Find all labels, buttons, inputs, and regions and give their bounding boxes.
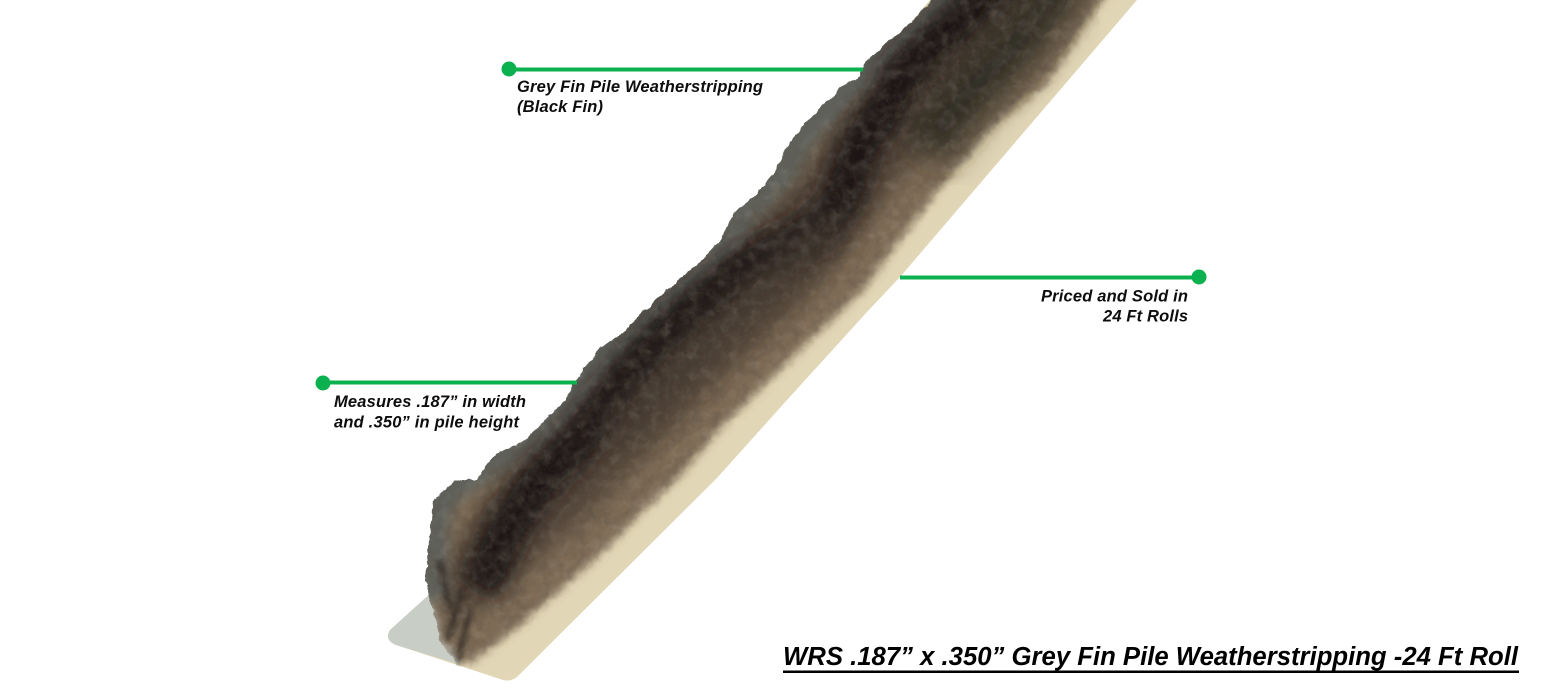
callout text: Grey Fin Pile Weatherstripping — [517, 78, 763, 96]
callout: measures — [316, 376, 577, 432]
tan backing strip — [388, 0, 1137, 680]
title text: WRS .187” x .350” Grey Fin Pile Weatherstripping -24 Ft Roll — [783, 643, 1519, 671]
leader dot — [1192, 270, 1206, 284]
title underline — [783, 670, 1519, 673]
callout text: Priced and Sold in — [1041, 288, 1188, 306]
leader dot — [502, 62, 516, 76]
leader line — [323, 380, 577, 384]
leader dot — [316, 376, 330, 390]
leader line — [509, 68, 863, 72]
callout text line 2: and .350” in pile height — [334, 414, 520, 432]
fur texture — [432, 0, 1102, 662]
callout text line 2: 24 Ft Rolls — [1102, 308, 1188, 326]
callout text: Measures .187” in width — [334, 393, 526, 411]
callout text line 2: (Black Fin) — [517, 98, 604, 116]
callout: grey fin pile — [502, 62, 863, 116]
pile fur — [425, 0, 1110, 668]
leader line — [900, 276, 1199, 280]
photo: weatherstripping strip — [380, 0, 1180, 700]
callout: priced and sold — [900, 270, 1206, 326]
bare grey backing end — [388, 592, 462, 665]
